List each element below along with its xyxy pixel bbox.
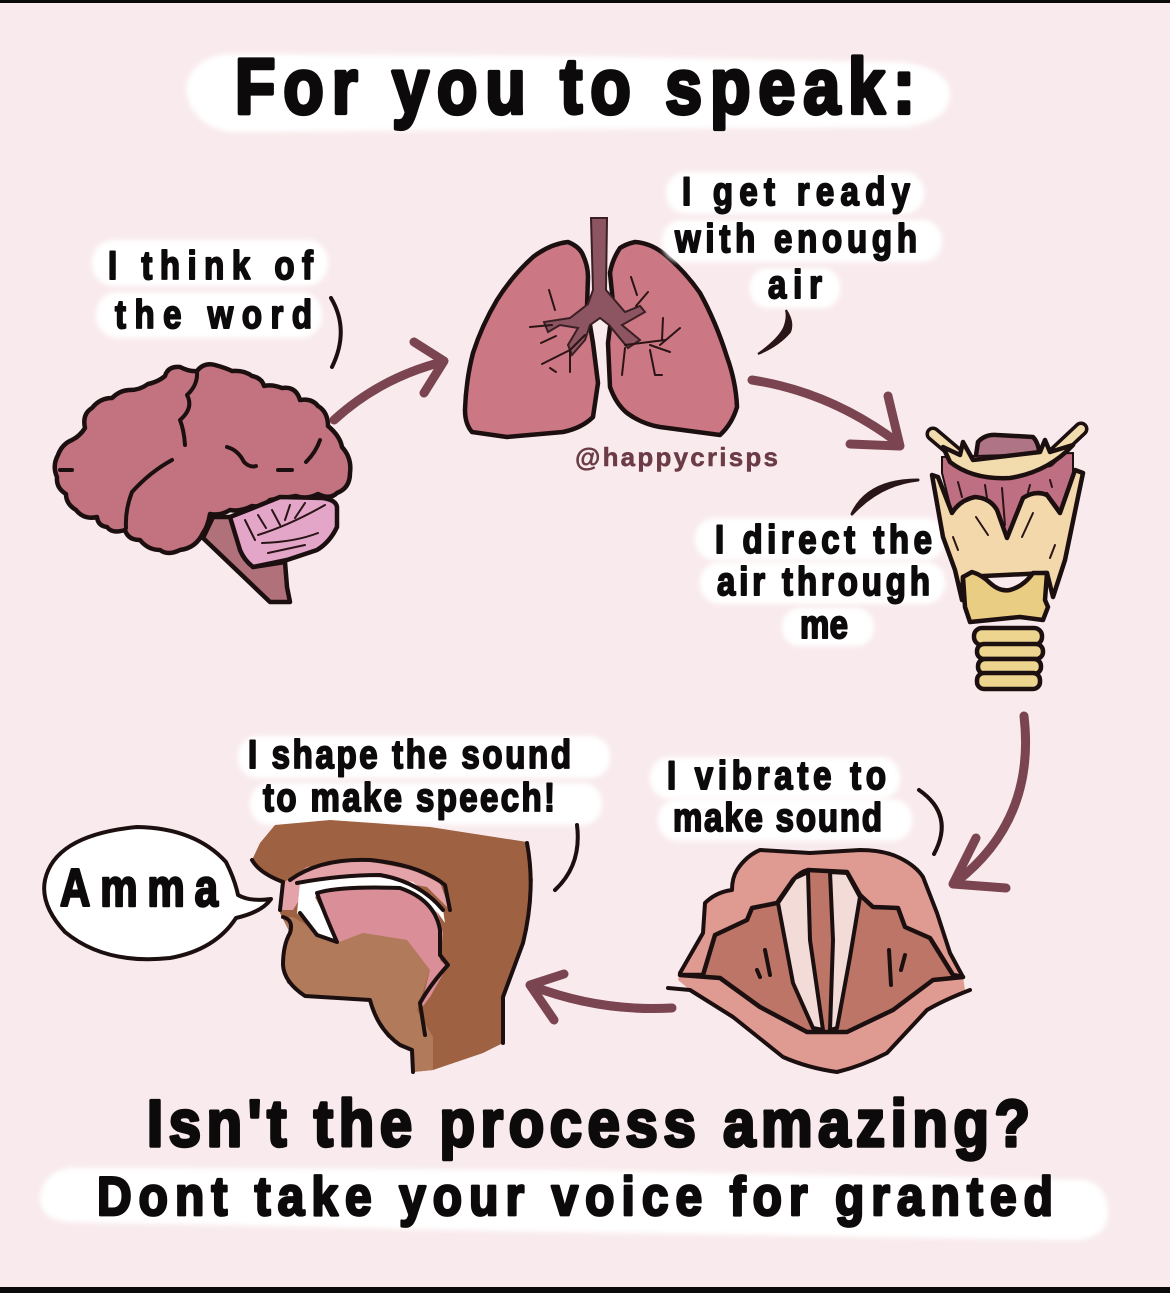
text: I vibrate to make sound: make sound xyxy=(673,795,882,840)
trachea and bronchi xyxy=(544,218,645,355)
text: I think of the word: the word xyxy=(115,292,312,337)
text: I get ready with enough air: air xyxy=(768,262,822,307)
text: I shape the sound to make speech!: I shape the sound xyxy=(248,732,571,777)
arrow: lungs to larynx xyxy=(752,380,900,446)
text: I direct the air through me: me xyxy=(800,602,848,647)
hyoid bone xyxy=(943,440,1073,478)
icon: vocal folds xyxy=(668,850,970,1072)
icon: mouth cross-section xyxy=(252,820,533,1072)
text: I vibrate to make sound xyxy=(650,753,942,854)
mouth cavity xyxy=(297,875,445,942)
text: I vibrate to make sound: I vibrate to xyxy=(667,753,886,798)
speech bubble: Amma: Amma xyxy=(60,860,218,918)
closing statement: Dont take your voice for granted xyxy=(97,1165,1053,1227)
brainstem xyxy=(203,517,290,602)
thyroid cartilage xyxy=(932,470,1083,600)
arrow: vocal folds to mouth xyxy=(530,974,672,1020)
text: I direct the air through me xyxy=(695,480,945,647)
cricoid cartilage xyxy=(963,572,1048,622)
hyoid horns xyxy=(933,429,1081,462)
credit handle: @happycrisps xyxy=(575,442,778,472)
speech bubble: Amma xyxy=(44,827,271,959)
icon: brain xyxy=(55,364,350,602)
membrane xyxy=(942,453,1073,538)
text: I think of the word: I think of xyxy=(108,243,314,288)
icon: larynx xyxy=(932,429,1083,689)
text: I shape the sound to make speech! xyxy=(238,732,610,890)
title: For you to speak: xyxy=(235,44,915,130)
cerebrum xyxy=(55,364,350,553)
lower jaw xyxy=(283,917,433,1072)
cerebellum xyxy=(230,497,337,567)
text: I think of the word xyxy=(92,240,341,367)
text: I get ready with enough air: I get ready xyxy=(682,169,911,214)
icon: lungs xyxy=(465,218,737,437)
text: I shape the sound to make speech!: to make speech! xyxy=(263,775,555,820)
text: I direct the air through me: I direct the xyxy=(715,517,932,562)
tracheal rings xyxy=(974,628,1042,645)
epiglottis xyxy=(975,435,1040,462)
head xyxy=(252,820,533,1072)
tongue and throat xyxy=(317,888,447,1010)
text: I direct the air through me: air through xyxy=(717,559,930,604)
text: I get ready with enough air: with enough xyxy=(674,216,917,261)
text: I get ready with enough air xyxy=(662,169,942,354)
closing question: Isn't the process amazing? xyxy=(147,1088,1030,1161)
arrow: larynx to vocal folds xyxy=(953,716,1026,888)
palate xyxy=(280,860,450,910)
arrow: brain to lungs xyxy=(334,342,444,420)
